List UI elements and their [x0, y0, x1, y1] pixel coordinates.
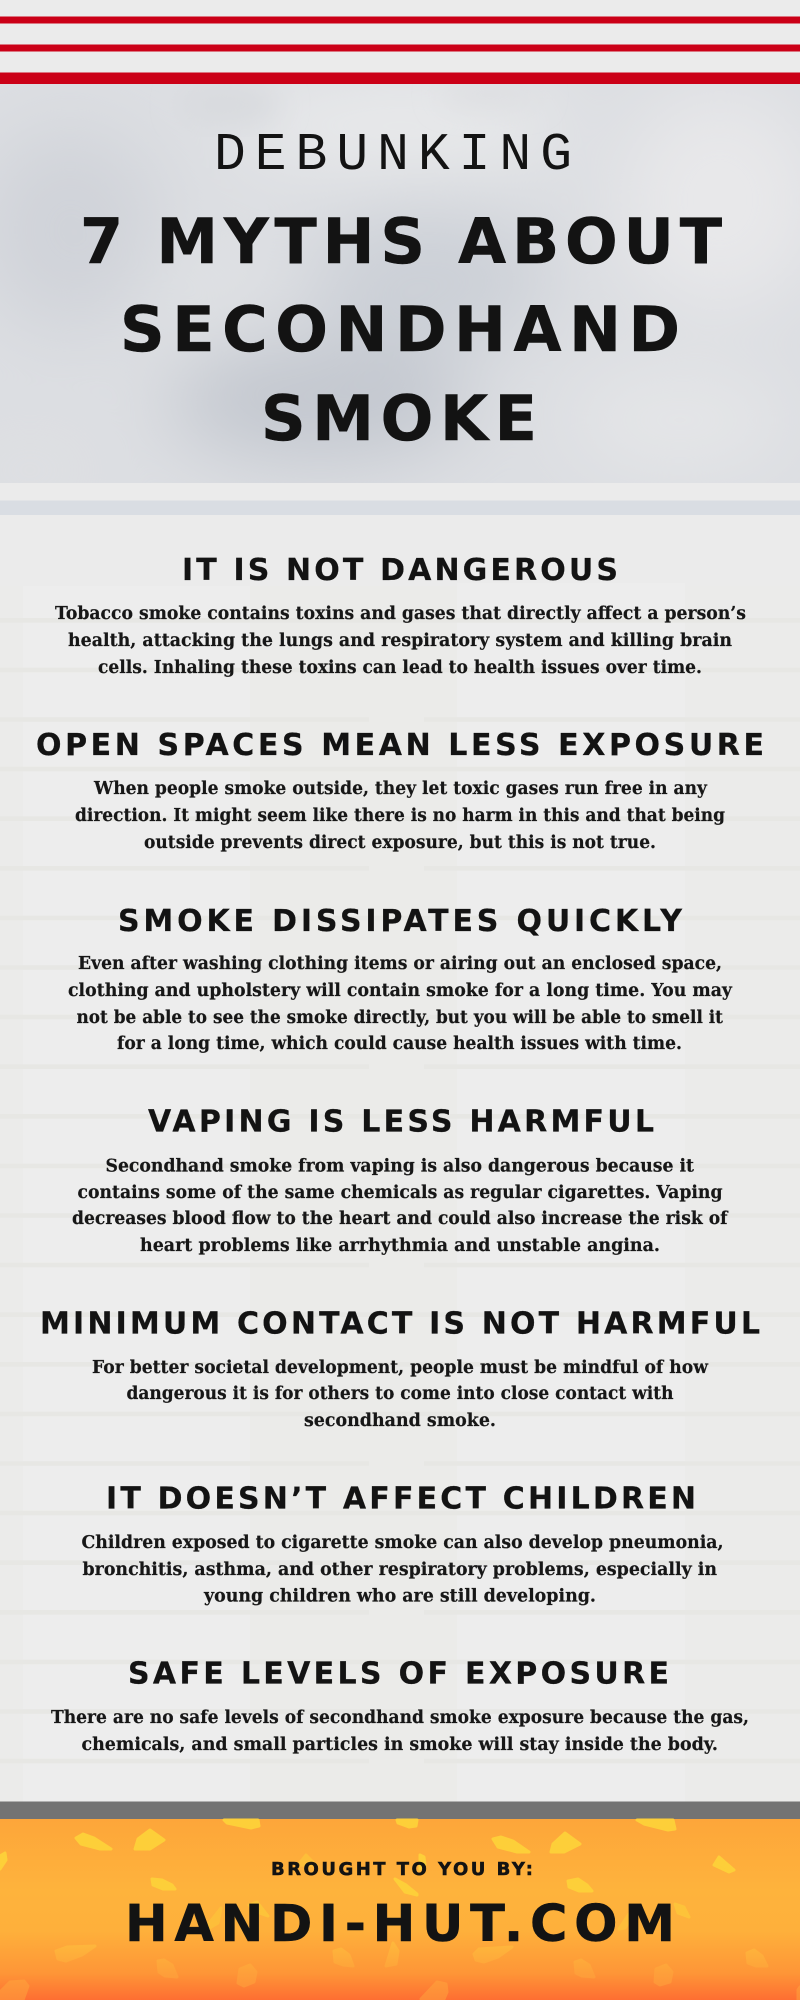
body text: health, attacking the lungs and respiratory system and killing brain: [68, 631, 732, 651]
heading: IT IS NOT DANGEROUS: [182, 553, 618, 588]
heading: OPEN SPACES MEAN LESS EXPOSURE: [36, 728, 764, 763]
heading: MINIMUM CONTACT IS NOT HARMFUL: [40, 1306, 760, 1342]
grey footer bar: [0, 1802, 800, 1819]
website name: HANDI-HUT.COM: [125, 1895, 675, 1954]
body text: [51, 1708, 749, 1755]
myth 1: [55, 553, 746, 678]
body text: [92, 1358, 709, 1431]
yellow petals: [0, 1820, 734, 1929]
body text: secondhand smoke.: [304, 1411, 496, 1431]
body text: contains some of the same chemicals as regular cigarettes. Vaping: [78, 1183, 722, 1203]
body text: chemicals, and small particles in smoke will stay inside the body.: [82, 1735, 718, 1755]
body text: Children exposed to cigarette smoke can also develop pneumonia,: [82, 1533, 724, 1553]
myth 7: [51, 1656, 749, 1755]
body text: young children who are still developing.: [203, 1586, 596, 1606]
body text: [68, 954, 733, 1054]
title: main headline: SMOKE: [261, 382, 537, 455]
orange gradient background: [0, 1819, 800, 2000]
hero panel: smoke background: [0, 84, 800, 500]
content background pattern: [0, 583, 800, 1802]
myth 4: [72, 1104, 729, 1256]
title: main headline: 7 MYTHS ABOUT: [80, 205, 722, 278]
body text: For better societal development, people must be mindful of how: [92, 1358, 709, 1378]
body text: [82, 1533, 724, 1606]
heading: SMOKE DISSIPATES QUICKLY: [118, 904, 683, 939]
body text: cells. Inhaling these toxins can lead to health issues over time.: [98, 658, 702, 678]
body text: When people smoke outside, they let toxic gases run free in any: [93, 779, 708, 799]
body text: outside prevents direct exposure, but this is not true.: [144, 833, 656, 853]
heading: IT DOESN’T AFFECT CHILDREN: [106, 1482, 696, 1516]
heading: VAPING IS LESS HARMFUL: [148, 1104, 654, 1140]
body text: There are no safe levels of secondhand smoke exposure because the gas,: [51, 1708, 749, 1728]
body text: Secondhand smoke from vaping is also dangerous because it: [106, 1156, 694, 1176]
title: debunking: DEBUNKING: [214, 125, 572, 185]
myth 3: [68, 904, 733, 1054]
body text: [55, 604, 746, 678]
body text: bronchitis, asthma, and other respiratory problems, especially in: [82, 1560, 717, 1580]
title block: [80, 125, 722, 455]
body text: for a long time, which could cause health issues with time.: [117, 1034, 682, 1054]
body text: not be able to see the smoke directly, but you will be able to smell it: [76, 1008, 723, 1028]
heading: SAFE LEVELS OF EXPOSURE: [128, 1656, 669, 1692]
footer panel: [0, 1819, 800, 2000]
myth 6: [82, 1482, 724, 1606]
body text: heart problems like arrhythmia and unstable angina.: [140, 1236, 660, 1256]
myth 2: [36, 728, 764, 853]
pale divider band: [0, 500, 800, 515]
body text: clothing and upholstery will contain smoke for a long time. You may: [68, 981, 733, 1001]
brought to you by label: BROUGHT TO YOU BY:: [271, 1859, 533, 1880]
body text: Tobacco smoke contains toxins and gases that directly affect a person’s: [55, 604, 746, 624]
lower petals: [0, 1943, 800, 2000]
body text: decreases blood flow to the heart and could also increase the risk of: [72, 1209, 729, 1229]
title: main headline: SECONDHAND: [120, 293, 680, 366]
title: main headline: [80, 205, 722, 455]
myth 5: [40, 1306, 760, 1431]
body text: [75, 779, 725, 853]
body text: Even after washing clothing items or airing out an enclosed space,: [78, 954, 722, 974]
body text: [72, 1156, 729, 1256]
body text: dangerous it is for others to come into close contact with: [126, 1384, 674, 1404]
top red stripes: [0, 16, 800, 84]
body text: direction. It might seem like there is no harm in this and that being: [75, 806, 725, 826]
